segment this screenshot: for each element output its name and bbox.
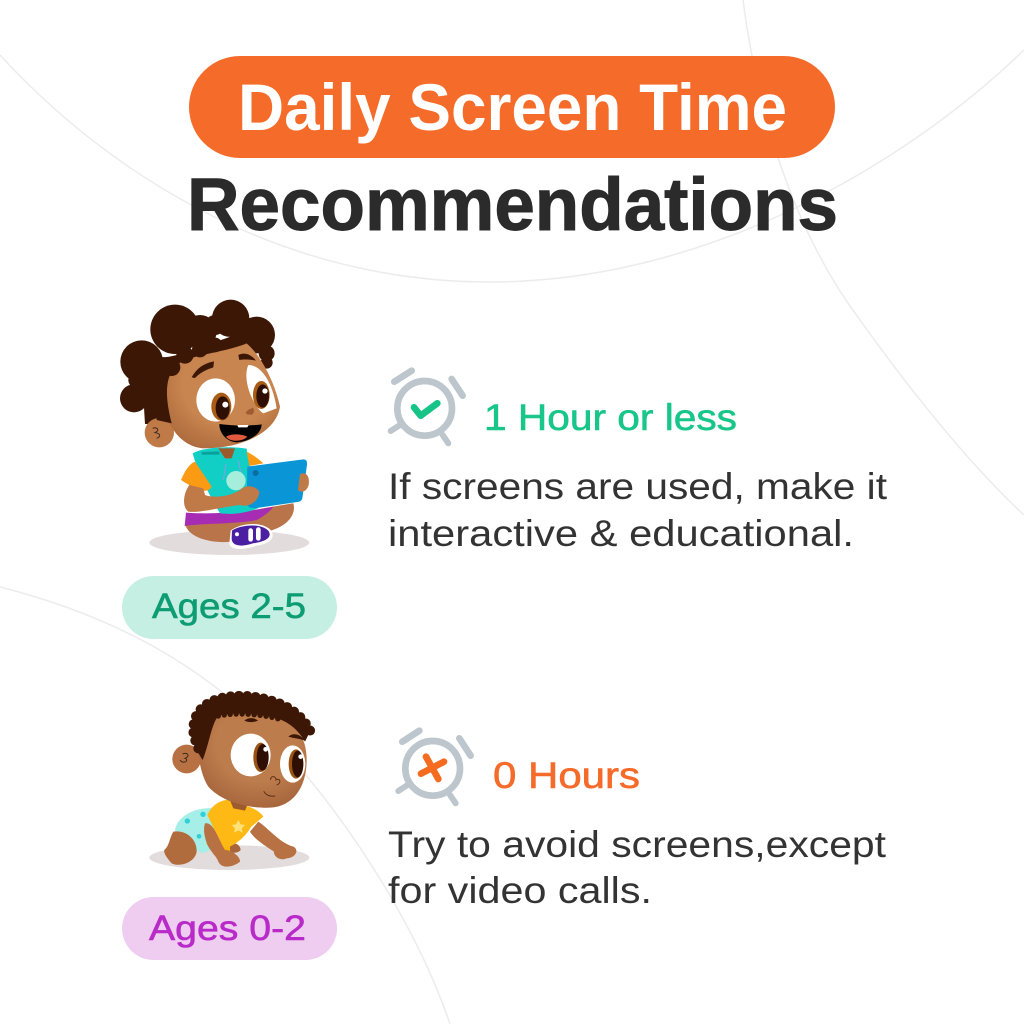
far arm <box>250 822 296 859</box>
text: ages 0-2 advice: Try to avoid screens,except <box>388 824 887 865</box>
title: Daily Screen Time pill <box>189 56 835 158</box>
icon: alarm clock with cross <box>398 731 471 803</box>
text: ages 0-2 advice <box>388 824 887 911</box>
status: 0 Hours: 0 Hours <box>493 755 640 796</box>
text: ages 2-5 advice: If screens are used, make it <box>388 466 888 507</box>
tablet <box>247 459 307 508</box>
heading: Recommendations: Recommendations <box>187 163 838 246</box>
shirt <box>207 799 263 848</box>
face <box>163 340 280 448</box>
hair back <box>120 300 275 424</box>
legs <box>185 503 294 542</box>
near arm <box>204 823 240 867</box>
back leg <box>164 831 197 865</box>
icon: alarm clock with check <box>391 371 463 443</box>
title: Daily Screen Time pill: Daily Screen Time <box>238 70 787 144</box>
badge: Ages 0-2 <box>122 897 337 960</box>
arm <box>184 485 259 512</box>
ear <box>145 418 174 447</box>
text: ages 0-2 advice: for video calls. <box>388 870 652 911</box>
head <box>198 710 307 808</box>
text: ages 2-5 advice: interactive & educational. <box>388 513 854 554</box>
illustration: child with tablet <box>120 300 309 555</box>
diaper <box>175 808 220 853</box>
text: ages 2-5 advice <box>388 466 888 554</box>
shorts <box>185 507 273 526</box>
hair <box>192 696 311 760</box>
badge: Ages 2-5: Ages 2-5 <box>152 587 306 626</box>
badge: Ages 2-5 <box>122 576 337 639</box>
vest <box>193 447 258 514</box>
shoe <box>229 524 273 549</box>
ear <box>172 745 201 773</box>
status: 1 Hour or less: 1 Hour or less <box>484 397 737 438</box>
badge: Ages 0-2: Ages 0-2 <box>149 909 306 948</box>
illustration: crawling baby <box>149 696 311 870</box>
